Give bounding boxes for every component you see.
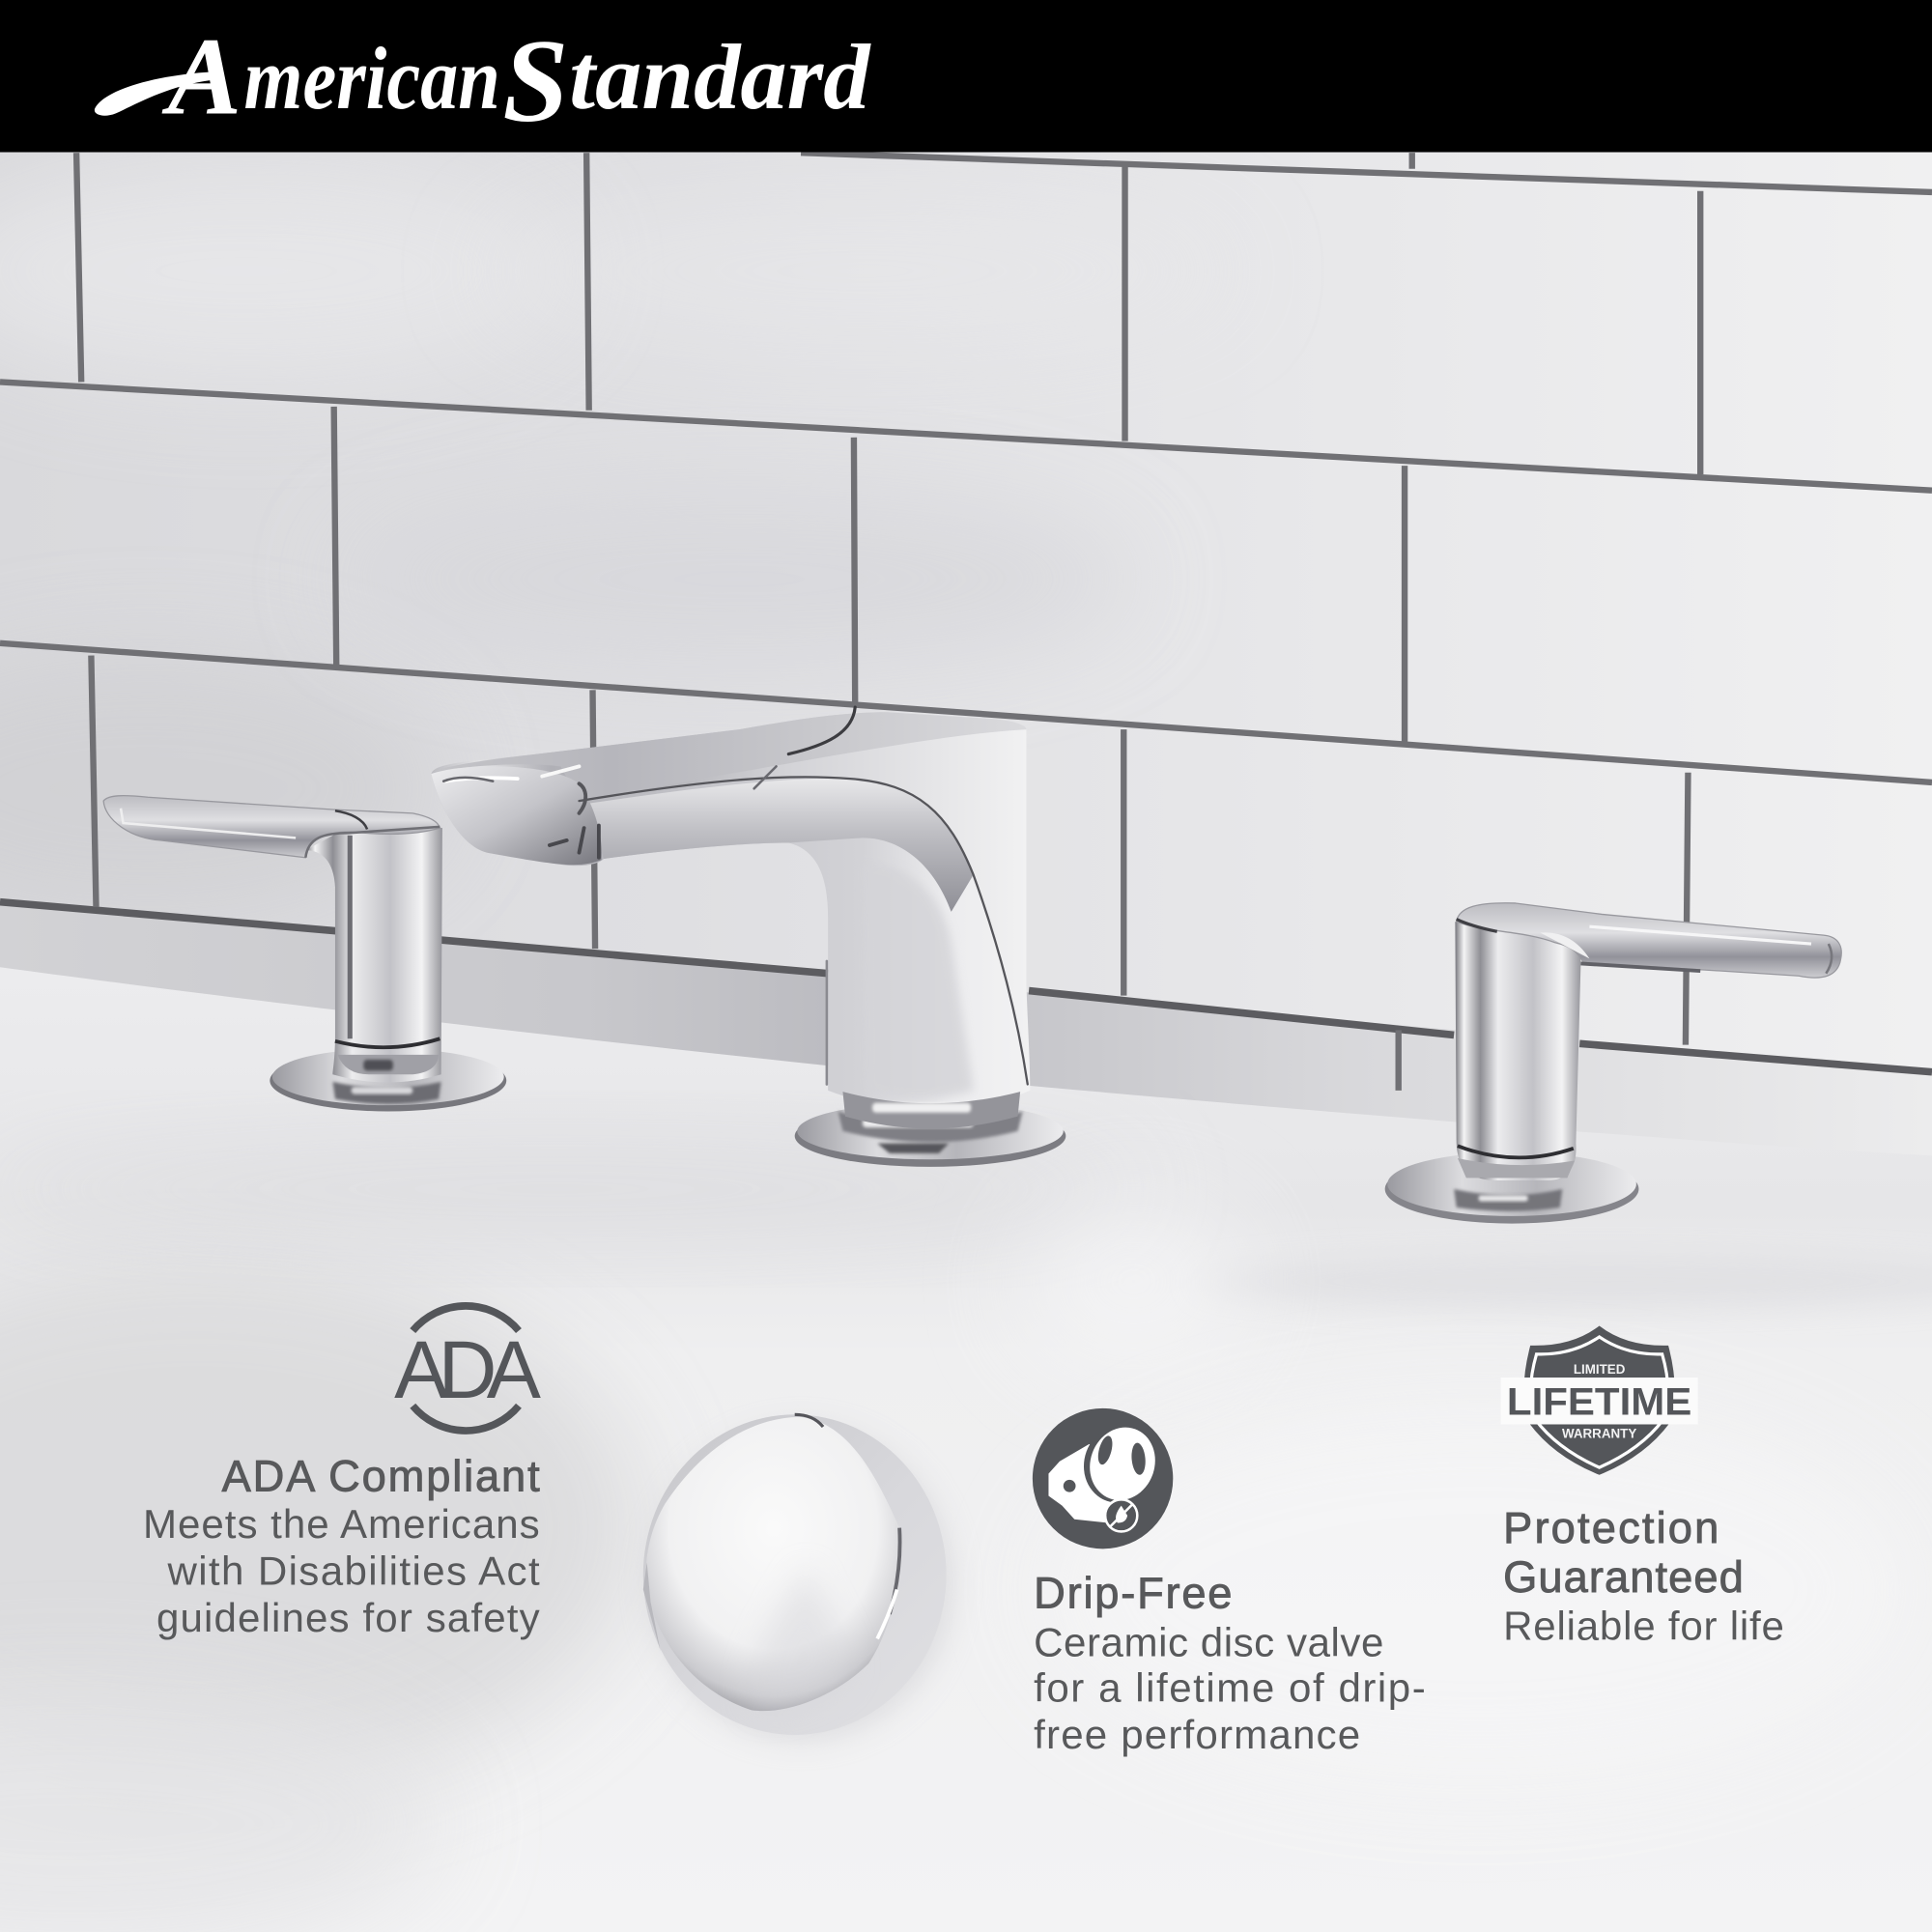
body: drip-free description <box>1034 1619 1426 1757</box>
right flange <box>1385 1152 1638 1224</box>
right post <box>1455 922 1580 1180</box>
icon: lifetime warranty shield: WARRANTY <box>1562 1427 1636 1441</box>
center spout <box>431 707 1065 1167</box>
body: drip-free description: Ceramic disc valve <box>1034 1619 1383 1664</box>
sink counter <box>0 967 1932 1932</box>
left lever <box>103 796 440 858</box>
icon: ceramic valve <box>1033 1408 1173 1548</box>
spout neck <box>589 779 974 912</box>
spout side face <box>579 729 1026 1084</box>
logo: American Standard: merican <box>244 29 500 128</box>
spout body <box>431 712 1030 1111</box>
spout flange <box>795 1103 1065 1167</box>
logo: American Standard: A <box>161 14 242 137</box>
drain plug <box>643 1414 952 1739</box>
right handle <box>1385 903 1841 1224</box>
icon: lifetime warranty shield: LIFETIME <box>1507 1380 1691 1423</box>
icon: lifetime warranty shield <box>1501 1325 1698 1475</box>
left handle <box>103 796 506 1112</box>
heading: Protection Guaranteed <box>1503 1503 1744 1602</box>
drain rim <box>643 1414 947 1735</box>
logo: American Standard: S <box>502 16 569 147</box>
icon: lifetime warranty shield: LIMITED <box>1574 1362 1626 1377</box>
right lever <box>1457 903 1841 978</box>
left post <box>305 815 442 1083</box>
header bar <box>0 0 1932 153</box>
body: ADA description <box>143 1501 540 1640</box>
tiled wall background <box>0 148 1932 1208</box>
heading: Protection Guaranteed: Guaranteed <box>1503 1552 1744 1602</box>
feature: protection guaranteed <box>1501 1325 1784 1649</box>
body: drip-free description: for a lifetime of drip- <box>1034 1664 1426 1710</box>
spout top deck <box>434 712 1026 801</box>
logo: American Standard <box>95 14 871 147</box>
body: drip-free description: free performance <box>1034 1712 1360 1757</box>
body: ADA description: guidelines for safety <box>156 1595 540 1640</box>
heading: Protection Guaranteed: Protection <box>1503 1503 1719 1552</box>
body: reliable for life: Reliable for life <box>1503 1604 1784 1649</box>
icon: ADA logo: ADA <box>394 1324 541 1415</box>
logo: American Standard: tandard <box>569 25 871 128</box>
body: ADA description: Meets the Americans <box>143 1501 540 1547</box>
left flange <box>270 1048 506 1112</box>
feature: ADA compliant <box>143 1306 541 1640</box>
heading: Drip-Free: Drip-Free <box>1034 1569 1233 1618</box>
spout nose <box>431 766 602 865</box>
body: ADA description: with Disabilities Act <box>166 1548 540 1593</box>
feature: drip-free <box>1033 1408 1426 1757</box>
heading: ADA Compliant: ADA Compliant <box>222 1451 540 1500</box>
drain dome <box>646 1417 901 1711</box>
